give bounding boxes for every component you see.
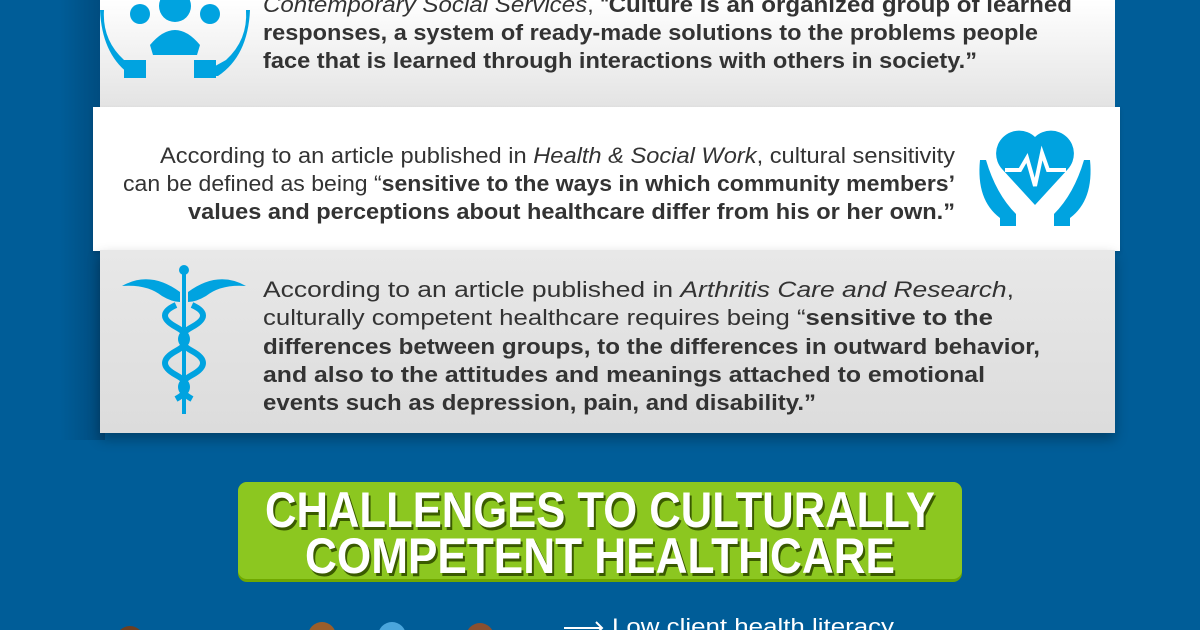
text block 2: [123, 143, 955, 224]
text block 1: [263, 0, 1072, 73]
icon: caduceus: [122, 265, 246, 414]
text block 3: differences between groups, to the differences in outward behavior,: [263, 334, 1040, 359]
left shadow strip: [60, 0, 105, 440]
panel: culturally competent healthcare: [100, 250, 1115, 433]
text block 1: face that is learned through interactions with others in society.”: [263, 48, 977, 73]
text block 1: responses, a system of ready-made solutions to the problems people: [263, 20, 1038, 45]
heading banner: COMPETENT HEALTHCARE: [307, 531, 897, 587]
panel: culture definition: [100, 0, 1115, 108]
icon: heart in hands: [979, 131, 1091, 226]
text block 2: can be defined as being “ sensitive to the ways in which community members’: [123, 171, 955, 196]
icon: hands holding people: [100, 0, 250, 78]
text block 2: values and perceptions about healthcare differ from his or her own.”: [188, 199, 955, 224]
text block 2: According to an article published in Health & Social Work , cultural sensitivity: [160, 143, 955, 168]
heading banner: [238, 482, 962, 587]
heading banner: COMPETENT HEALTHCARE: [305, 528, 895, 584]
text block 3: events such as depression, pain, and disability.”: [263, 390, 816, 415]
text block 3: [263, 277, 1040, 415]
text block 3: culturally competent healthcare requires being “ sensitive to the: [263, 305, 993, 330]
heading banner: CHALLENGES TO CULTURALLY: [267, 485, 937, 541]
panel: cultural sensitivity: [93, 107, 1120, 251]
text block 3: and also to the attitudes and meanings attached to emotional: [263, 362, 985, 387]
people icons: [116, 622, 494, 630]
heading banner: CHALLENGES TO CULTURALLY: [265, 482, 935, 538]
text block 3: According to an article published in Arthritis Care and Research ,: [263, 277, 1014, 302]
